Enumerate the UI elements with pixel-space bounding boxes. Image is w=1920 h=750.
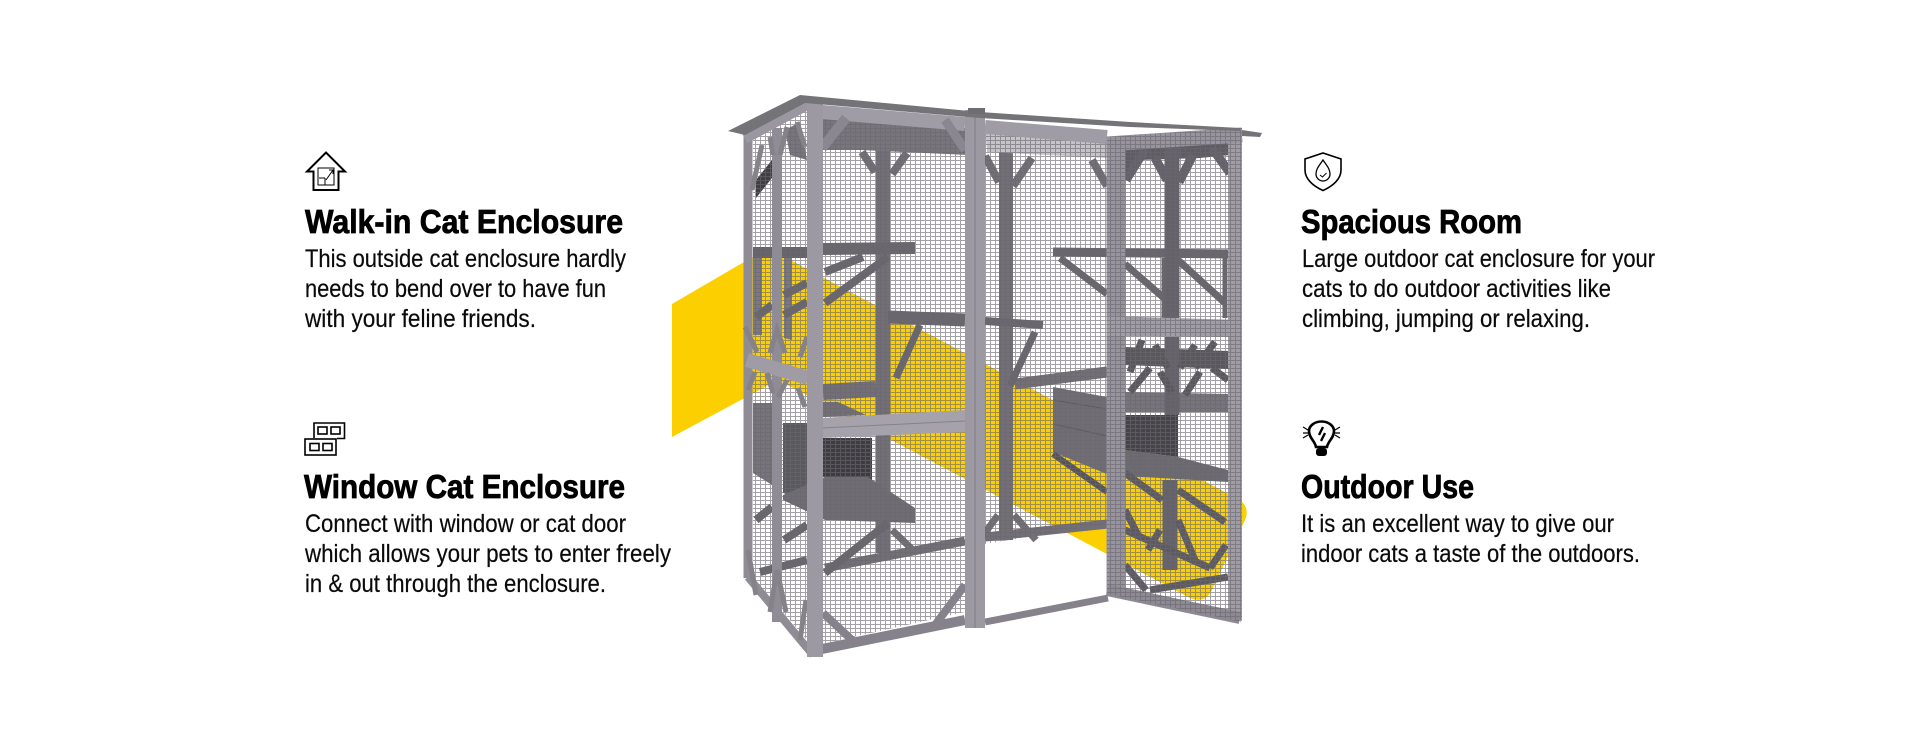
feature: walk-in cat enclosure [304,152,627,333]
body text: Connect with window or cat door [305,511,626,538]
roof [728,95,1262,137]
yellow diagonal ribbon [672,248,1247,600]
body text: This outside cat enclosure hardly [305,246,627,273]
body text: with your feline friends. [304,306,536,333]
mesh panels [753,105,1107,644]
body text: which allows your pets to enter freely [304,541,672,568]
feature: window cat enclosure [304,423,672,598]
body text [304,511,672,598]
body text [1302,246,1655,333]
body text: needs to bend over to have fun [305,276,606,303]
body text: It is an excellent way to give our [1301,511,1614,538]
side panel plates [753,247,807,500]
feature: outdoor use [1301,422,1640,568]
door frame [1107,128,1242,622]
icon: house [307,152,345,190]
upper roof shade [756,117,1230,198]
icon: light bulb [1303,422,1340,456]
heading: Outdoor Use [1301,469,1474,506]
heading: Walk-in Cat Enclosure [305,204,623,241]
shelves and braces [756,248,1230,386]
heading: Spacious Room [1301,204,1522,241]
side frame [744,103,813,655]
back wall posts and beams [823,150,1108,568]
nesting box, tunnel and lower shelf [756,387,1107,573]
heading: Window Cat Enclosure [304,469,625,506]
body text: Large outdoor cat enclosure for your [1302,246,1655,273]
body text: cats to do outdoor activities like [1302,276,1611,303]
body text: in & out through the enclosure. [305,571,606,598]
body text: climbing, jumping or relaxing. [1302,306,1590,333]
icon: shield with drop [1305,153,1341,190]
front frame [815,103,1108,657]
feature: spacious room [1301,153,1655,333]
icon: window bricks [305,423,344,455]
body text [304,246,627,333]
body text: indoor cats a taste of the outdoors. [1301,541,1640,568]
cat enclosure illustration [728,95,1262,657]
body text [1301,511,1640,568]
door back structure [1125,143,1230,590]
